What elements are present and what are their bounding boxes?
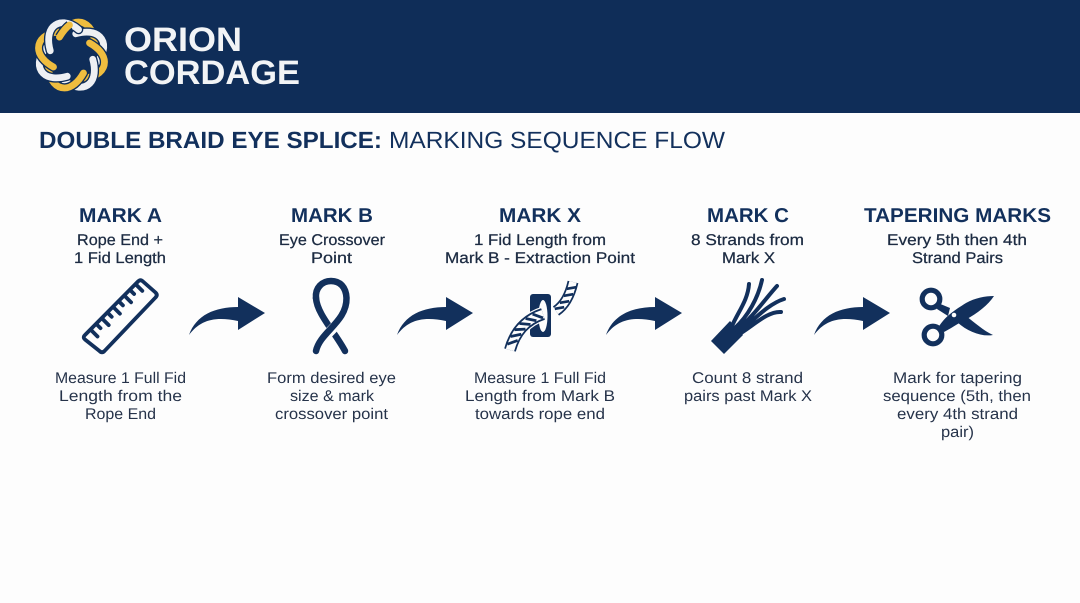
title <box>39 127 726 153</box>
heading: Mark A: MARK A <box>79 205 162 227</box>
subtitle: Mark X: 1 Fid Length from <box>474 232 606 249</box>
arrow: B to X <box>397 297 473 335</box>
arrow: A to B <box>189 297 265 335</box>
icon: ruler <box>84 280 157 352</box>
step: Tapering Marks <box>864 205 1051 441</box>
brand name: CORDAGE <box>124 54 300 92</box>
step: Mark X <box>445 205 636 423</box>
step: Mark B <box>267 205 396 423</box>
step: Mark C <box>684 205 813 405</box>
subtitle: Mark B: Point <box>311 250 353 267</box>
description: Mark A: Rope End <box>85 406 156 423</box>
description: Mark B: Form desired eye <box>267 370 396 387</box>
subtitle: Tapering Marks: Every 5th then 4th <box>887 232 1027 249</box>
heading: Tapering Marks: TAPERING MARKS <box>864 205 1051 227</box>
description: Mark X <box>465 370 615 423</box>
header banner <box>0 0 1080 113</box>
icon: frayed rope <box>711 280 784 354</box>
description: Tapering Marks: pair) <box>941 424 974 441</box>
description: Mark A: Measure 1 Full Fid <box>55 370 186 387</box>
step: Mark A <box>55 205 186 423</box>
heading: Mark C: MARK C <box>707 205 789 227</box>
icon: scissors <box>922 290 994 344</box>
description: Mark X: towards rope end <box>475 406 605 423</box>
description: Mark A: Length from the <box>59 388 182 405</box>
icon: eye loop <box>316 281 347 351</box>
icon: rope through buckle <box>507 282 576 350</box>
description: Mark X: Length from Mark B <box>465 388 615 405</box>
heading: Mark X: MARK X <box>499 205 582 227</box>
subtitle: Tapering Marks: Strand Pairs <box>912 250 1003 267</box>
brand name <box>124 21 300 92</box>
subtitle: Mark B: Eye Crossover <box>279 232 385 249</box>
subtitle: Mark X <box>445 232 636 267</box>
title: DOUBLE BRAID EYE SPLICE: <box>39 127 382 153</box>
icon: braided ring logo <box>32 15 111 95</box>
description: Mark B: crossover point <box>275 406 389 423</box>
subtitle: Mark X: Mark B - Extraction Point <box>445 250 636 267</box>
subtitle: Mark C: 8 Strands from <box>691 232 804 249</box>
description: Mark C: Count 8 strand <box>692 370 803 387</box>
brand name: ORION <box>124 21 242 59</box>
subtitle: Tapering Marks <box>887 232 1027 267</box>
description: Tapering Marks: every 4th strand <box>897 406 1018 423</box>
subtitle: Mark A <box>74 232 166 267</box>
arrow: X to C <box>606 297 682 335</box>
arrow: C to tapering <box>814 297 890 335</box>
description: Tapering Marks <box>883 370 1031 441</box>
subtitle: Mark C <box>691 232 804 267</box>
title: MARKING SEQUENCE FLOW <box>389 127 726 153</box>
heading: Mark B: MARK B <box>291 205 373 227</box>
description: Mark A <box>55 370 186 423</box>
description: Mark C: pairs past Mark X <box>684 388 813 405</box>
subtitle: Mark A: Rope End + <box>77 232 163 249</box>
description: Mark C <box>684 370 813 405</box>
subtitle: Mark B <box>279 232 385 267</box>
description: Mark B <box>267 370 396 423</box>
description: Mark B: size & mark <box>290 388 374 405</box>
description: Mark X: Measure 1 Full Fid <box>474 370 606 387</box>
description: Tapering Marks: Mark for tapering <box>893 370 1022 387</box>
subtitle: Mark A: 1 Fid Length <box>74 250 166 267</box>
description: Tapering Marks: sequence (5th, then <box>883 388 1031 405</box>
subtitle: Mark C: Mark X <box>722 250 776 267</box>
